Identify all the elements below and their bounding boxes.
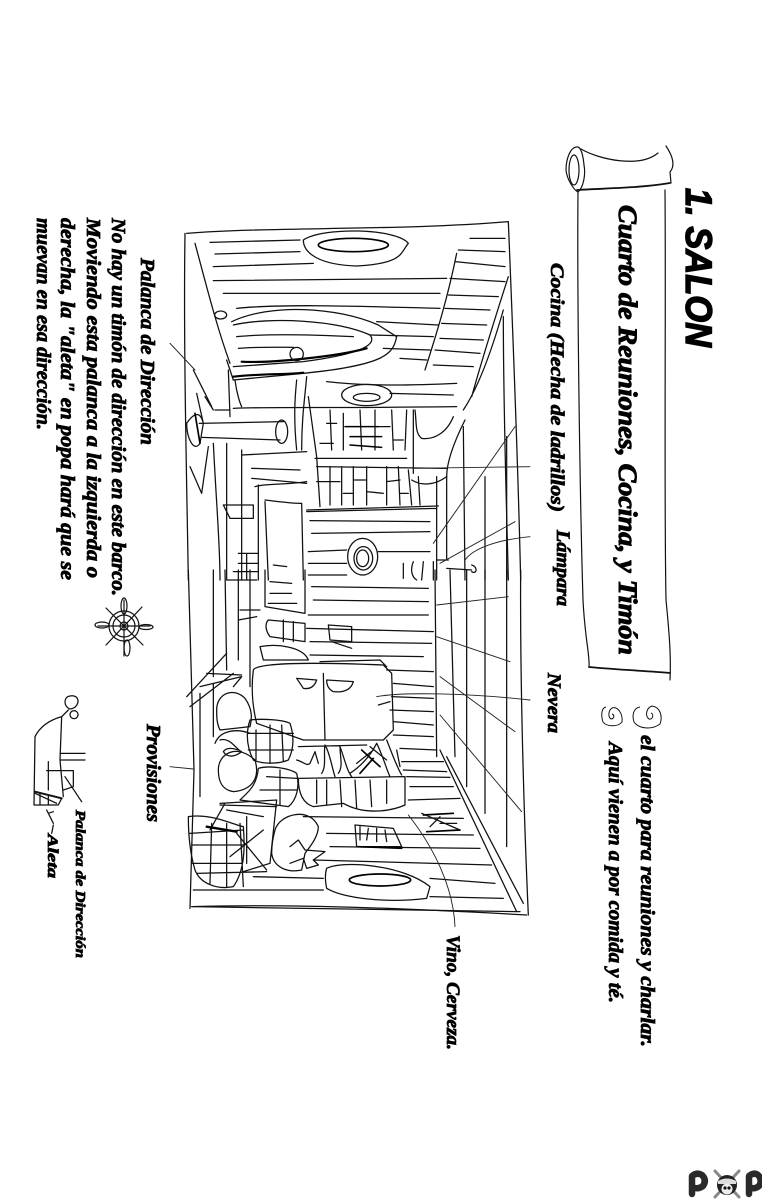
- bottom hatch: [325, 865, 430, 900]
- lamp: [403, 560, 476, 580]
- hatch: [303, 231, 408, 266]
- sacks: [217, 692, 257, 792]
- sack with tie: [272, 814, 318, 871]
- sketch: lower half, storage: [170, 570, 530, 927]
- bullet: spiral two: [602, 707, 622, 726]
- sketch: upper half, ceiling and kitchen: [170, 222, 530, 580]
- paragraph line 4: muevan en esa dirección.: [32, 218, 54, 430]
- scroll banner: [566, 146, 673, 680]
- leader lines: [170, 343, 530, 563]
- bullet text two: Aquí vienen a por comida y té.: [604, 740, 626, 1003]
- barrels: [247, 719, 293, 763]
- crate with sack: [210, 800, 277, 872]
- bricks: [308, 397, 465, 507]
- label: lampara: Lámpara: [552, 529, 573, 607]
- bottles crate: [298, 777, 405, 811]
- paragraph: steering explanation: [32, 217, 129, 596]
- label: palanca de direccion: Palanca de Dirección: [136, 257, 158, 445]
- fridge: [252, 660, 393, 740]
- bullet text one: el cuarto para reuniones y charlar.: [636, 735, 658, 1047]
- bullet: spiral one: [633, 706, 661, 728]
- label: aleta: Aleta: [44, 833, 60, 879]
- icon: ship wheel: [95, 598, 153, 656]
- label: palanca small: Palanca de Dirección: [72, 810, 87, 958]
- leader lines: [170, 597, 530, 927]
- subtitle: Cuarto de Reuniones, Cocina, y Timón: [613, 205, 642, 655]
- label: cocina: Cocina (Hecha de ladrillos): [546, 263, 567, 512]
- shelves top-left: [187, 653, 242, 797]
- wall rail: [307, 427, 507, 580]
- wall planks: [193, 587, 520, 912]
- label: vino cerveza: Vino, Cerveza.: [442, 935, 463, 1050]
- title: 1. Salon: 1. SALON: [678, 188, 719, 348]
- icon: figure at the lever: [34, 696, 85, 833]
- ceiling planks: [210, 238, 505, 395]
- cupboard: [227, 580, 352, 660]
- paragraph line 3: derecha, la "aleta" en popa hará que se: [56, 218, 78, 580]
- paragraph line 1: No hay un timón de dirección en este barco.: [107, 217, 129, 596]
- porthole: [348, 538, 378, 575]
- label: provisiones: Provisiones: [142, 723, 164, 822]
- skylight: [232, 309, 397, 380]
- pipe: [199, 407, 457, 440]
- label: nevera: Nevera: [543, 672, 564, 734]
- room sketch: [170, 222, 530, 927]
- logo: POP: [692, 1171, 761, 1197]
- table, shelves: [213, 443, 307, 580]
- vents: [355, 825, 402, 847]
- small hatch: [342, 384, 392, 406]
- paragraph line 2: Moviendo esta palanca a la izquierda o: [82, 217, 104, 578]
